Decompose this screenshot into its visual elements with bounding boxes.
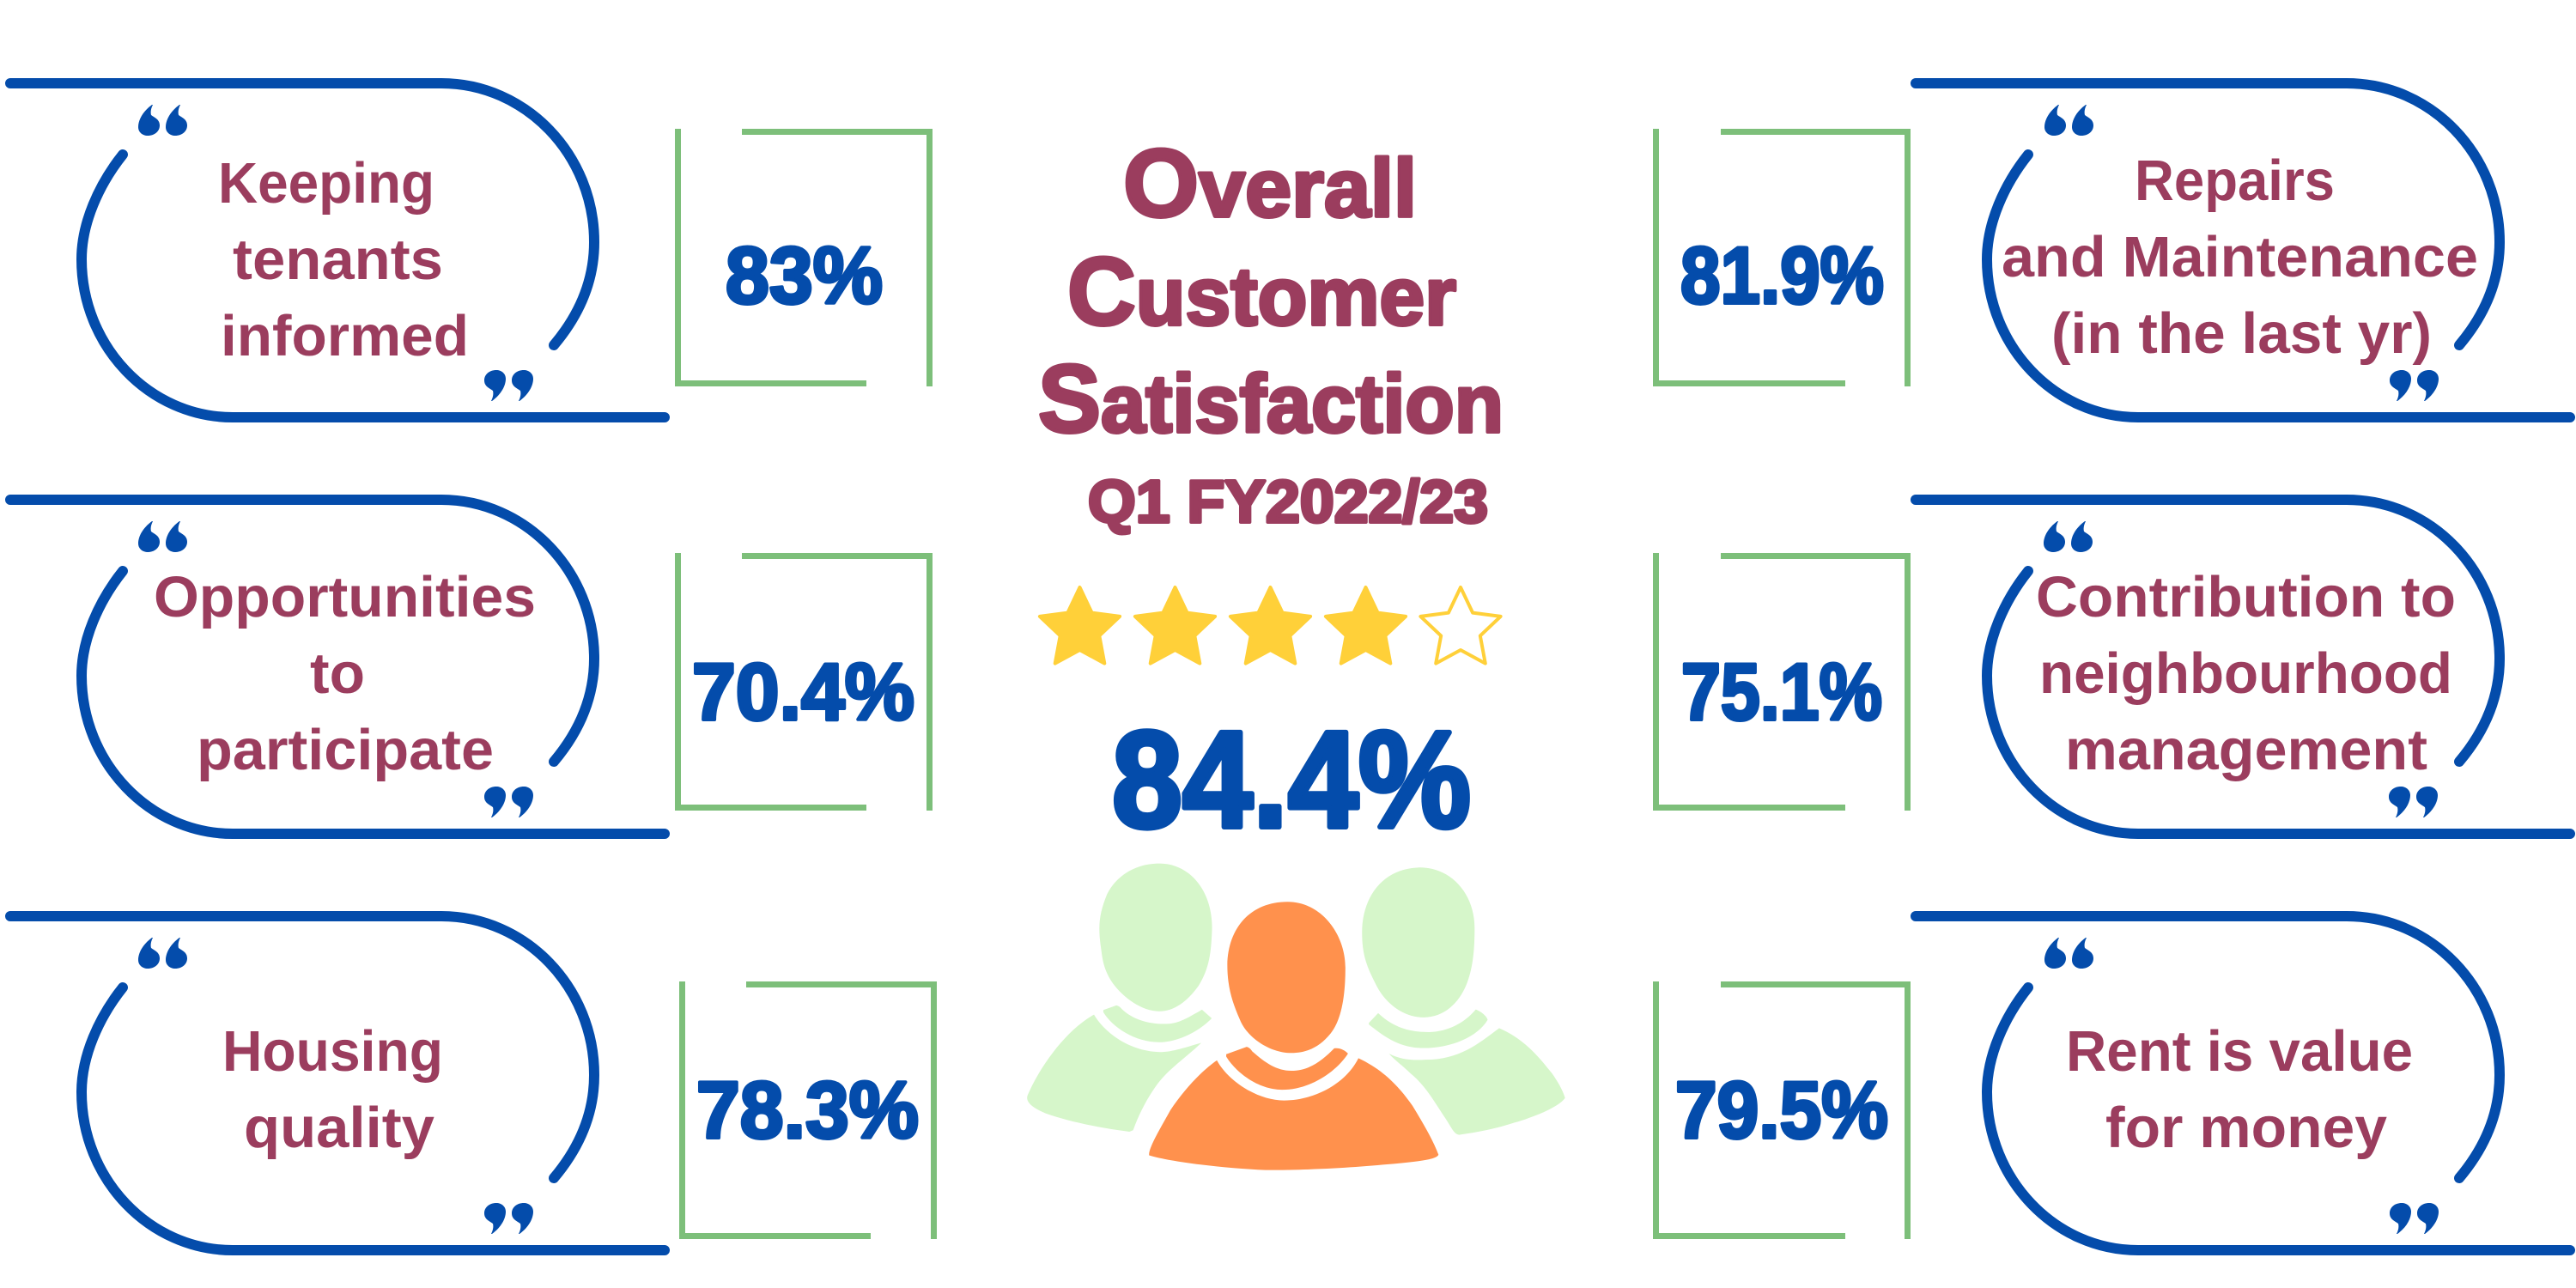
title — [1038, 130, 1504, 453]
panel: repairs and maintenance — [1656, 83, 2570, 417]
icon: opening quote — [138, 521, 187, 552]
bracket frame — [678, 129, 929, 386]
title: Customer — [1067, 238, 1456, 345]
star rating — [1040, 587, 1501, 664]
value: 79.5%: 79.5% — [1675, 1065, 1888, 1155]
speech outline — [10, 83, 665, 417]
panel: housing quality — [10, 916, 934, 1250]
icon: closing quote — [484, 787, 533, 817]
label text — [154, 565, 536, 782]
icon: closing quote — [484, 1203, 533, 1234]
bracket frame — [682, 981, 934, 1239]
left person — [1027, 864, 1212, 1132]
value: 83%: 83% — [726, 230, 883, 320]
label text: participate — [197, 718, 494, 782]
speech outline — [1916, 916, 2570, 1250]
value: 81.9%: 81.9% — [1680, 230, 1884, 320]
label text — [2002, 149, 2478, 366]
label text — [2066, 1019, 2413, 1160]
label text — [2036, 565, 2456, 782]
speech outline — [1916, 83, 2570, 417]
label text: Opportunities — [154, 565, 536, 629]
value: 70.4%: 70.4% — [692, 647, 914, 737]
panel: keeping tenants informed — [10, 83, 929, 417]
title: Satisfaction — [1038, 345, 1504, 453]
icon: people group — [1027, 864, 1565, 1170]
title: Overall — [1123, 130, 1417, 237]
label text: Repairs — [2135, 149, 2335, 213]
icon: opening quote — [2044, 938, 2093, 969]
icon: closing quote — [2390, 370, 2439, 401]
label text: (in the last yr) — [2051, 301, 2432, 366]
icon: opening quote — [138, 938, 187, 969]
speech outline — [1916, 500, 2570, 834]
bracket frame — [1656, 981, 1908, 1239]
label text: Contribution to — [2036, 565, 2456, 629]
bracket frame — [1656, 553, 1908, 811]
label text: for money — [2105, 1096, 2387, 1160]
value: 78.3%: 78.3% — [696, 1065, 919, 1155]
bracket frame — [1656, 129, 1908, 386]
label text: tenants — [233, 228, 443, 292]
centre person — [1149, 902, 1438, 1170]
icon: opening quote — [2044, 105, 2093, 136]
bracket frame — [678, 553, 929, 811]
label text: Keeping — [218, 151, 434, 216]
icon: opening quote — [138, 105, 187, 136]
panel: rent is value for money — [1656, 916, 2570, 1250]
value: 75.1%: 75.1% — [1681, 647, 1882, 737]
panel: opportunities to participate — [10, 500, 929, 834]
speech outline — [10, 916, 665, 1250]
panel: contribution to neighbourhood management — [1656, 500, 2570, 834]
right person — [1362, 867, 1565, 1135]
label text: management — [2065, 718, 2427, 782]
label text: neighbourhood — [2039, 641, 2452, 706]
label text: Housing — [222, 1019, 443, 1084]
label text: to — [310, 641, 365, 706]
label text: informed — [221, 304, 469, 368]
label text: quality — [244, 1096, 434, 1160]
label text: and Maintenance — [2002, 225, 2478, 289]
label text: Rent is value — [2066, 1019, 2413, 1084]
label text — [218, 151, 469, 368]
label text — [222, 1019, 443, 1160]
subtitle: Q1 FY2022/23 — [1088, 468, 1488, 535]
icon: closing quote — [2389, 787, 2438, 817]
icon: closing quote — [484, 370, 533, 401]
icon: opening quote — [2044, 521, 2093, 552]
overall score: 84.4% — [1112, 702, 1471, 856]
speech outline — [10, 500, 665, 834]
icon: closing quote — [2390, 1203, 2439, 1234]
